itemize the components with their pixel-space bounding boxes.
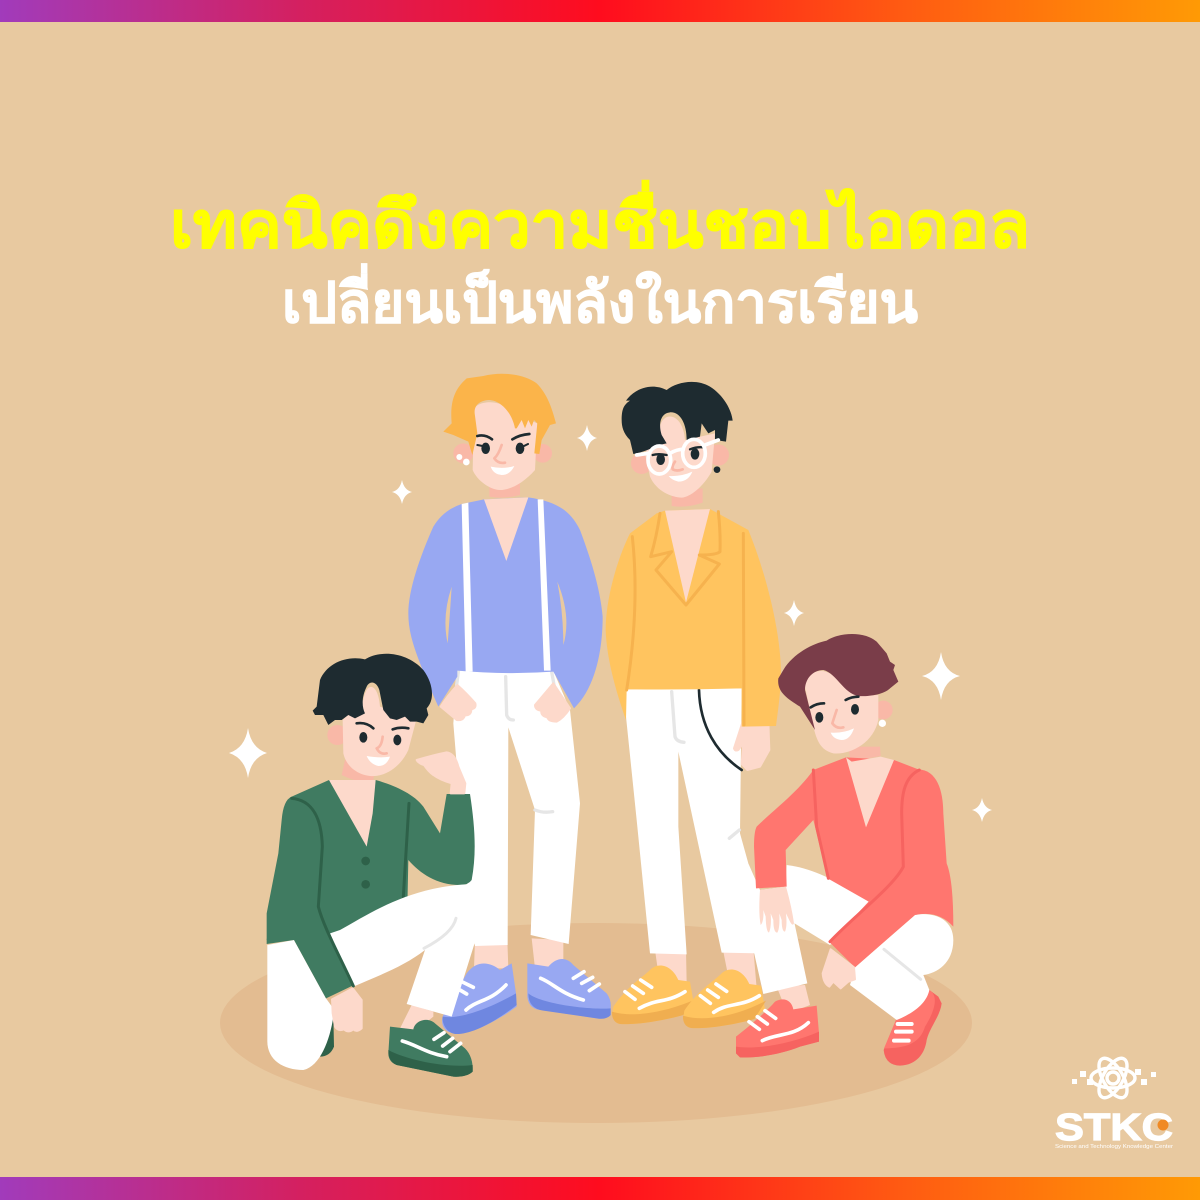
top gradient bar — [0, 0, 1200, 22]
STKC logo: Science and Technology Knowledge Center — [1055, 1144, 1173, 1150]
STKC logo: STKC — [1055, 1107, 1173, 1149]
character: green cardigan sitting — [267, 654, 477, 1077]
sparkles — [229, 425, 992, 822]
character: blue shirt with suspenders — [408, 374, 611, 1034]
character: coral shirt squatting — [736, 634, 953, 1066]
title: เทคนิคดึงความชื่นชอบไอดอล — [170, 180, 1030, 261]
bottom gradient bar — [0, 1177, 1200, 1200]
character: yellow shirt with glasses — [606, 382, 781, 1028]
subtitle: เปลี่ยนเป็นพลังในการเรียน — [282, 263, 918, 334]
floor shadow — [220, 923, 972, 1123]
STKC logo — [1055, 1054, 1173, 1150]
